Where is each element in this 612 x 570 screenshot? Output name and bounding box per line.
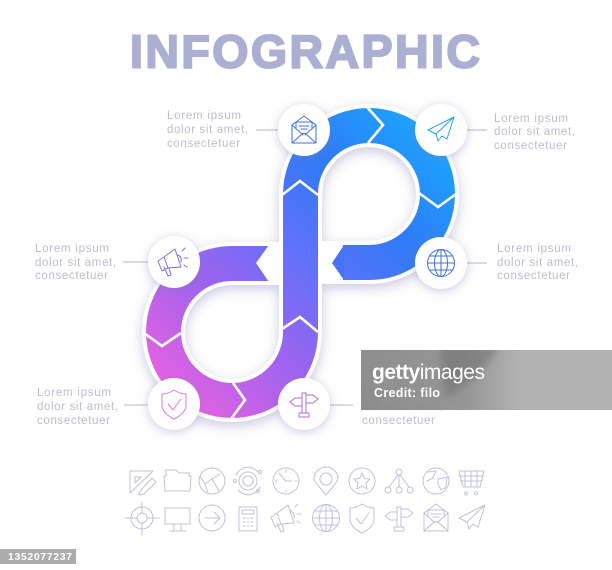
icon: globe	[312, 504, 340, 532]
text block: top right	[494, 113, 575, 152]
icon: map pin	[314, 467, 338, 495]
text block: middle right	[497, 243, 578, 282]
text block: middle right: consectetuer	[497, 270, 570, 282]
text block: top right: consectetuer	[494, 140, 567, 152]
text block: middle left: consectetuer	[35, 270, 108, 282]
text block: top left: consectetuer	[167, 138, 240, 150]
icon: signpost	[385, 507, 413, 531]
text block: top left	[167, 110, 248, 150]
text block: top right: dolor sit amet,	[494, 126, 575, 138]
icon badge: globe	[415, 237, 467, 289]
text block: bottom left: dolor sit amet,	[37, 401, 118, 413]
image id tag: 1352077237	[8, 551, 72, 563]
icon: clock	[273, 468, 299, 494]
text block: bottom left: Lorem ipsum	[37, 387, 111, 399]
text block: middle right: dolor sit amet,	[497, 257, 578, 269]
icon: orbit	[234, 467, 262, 495]
icon: hierarchy	[385, 469, 413, 493]
text block: top right: Lorem ipsum	[494, 113, 568, 125]
icon: target	[125, 502, 159, 535]
ribbon notch: left end	[256, 245, 269, 282]
icon row 1	[130, 467, 484, 495]
watermark banner	[361, 345, 612, 410]
icon: cart	[459, 471, 484, 495]
icon: paper plane	[459, 505, 485, 529]
icon: earth	[423, 468, 449, 494]
icon badge: shield	[148, 378, 200, 430]
icon: network sphere	[199, 468, 225, 494]
title: INFOGRAPHIC	[130, 26, 480, 78]
text block: bottom right: Lorem ipsum	[362, 387, 436, 399]
icon: envelope	[424, 504, 448, 531]
text block: middle left	[35, 243, 116, 282]
segment chevrons	[144, 107, 456, 419]
icon: ruler and pencil	[130, 471, 156, 495]
text block: bottom left: consectetuer	[37, 415, 110, 427]
icon: monitor	[165, 508, 190, 531]
image id tag	[0, 549, 76, 564]
icon badge: paper plane	[415, 104, 467, 156]
watermark credit: Credit: filo	[374, 386, 440, 400]
text block: bottom left	[37, 387, 118, 427]
arrow tip: right end	[332, 245, 344, 280]
icon badge: megaphone	[148, 236, 200, 288]
icon badge: signpost	[278, 378, 330, 430]
icon: shield	[350, 504, 374, 533]
icon: folder	[164, 470, 191, 491]
text block: top left: Lorem ipsum	[167, 110, 241, 122]
text block: middle left: dolor sit amet,	[35, 257, 116, 269]
icon: megaphone	[271, 504, 301, 532]
text block: bottom right: dolor sit amet,	[362, 401, 443, 413]
text block: top left: dolor sit amet,	[167, 124, 248, 136]
icon: star badge	[349, 468, 375, 494]
watermark logo: gettyimages	[372, 361, 485, 384]
icon badge: envelope	[278, 104, 330, 156]
icon: calculator	[239, 507, 257, 531]
icon row 2	[125, 502, 485, 535]
text block: middle left: Lorem ipsum	[35, 243, 109, 255]
text block: bottom right	[362, 387, 443, 427]
text block: middle right: Lorem ipsum	[497, 243, 571, 255]
text block: bottom right: consectetuer	[362, 415, 435, 427]
looped arrow ribbon	[144, 107, 456, 419]
icon: arrow circle	[199, 505, 225, 531]
